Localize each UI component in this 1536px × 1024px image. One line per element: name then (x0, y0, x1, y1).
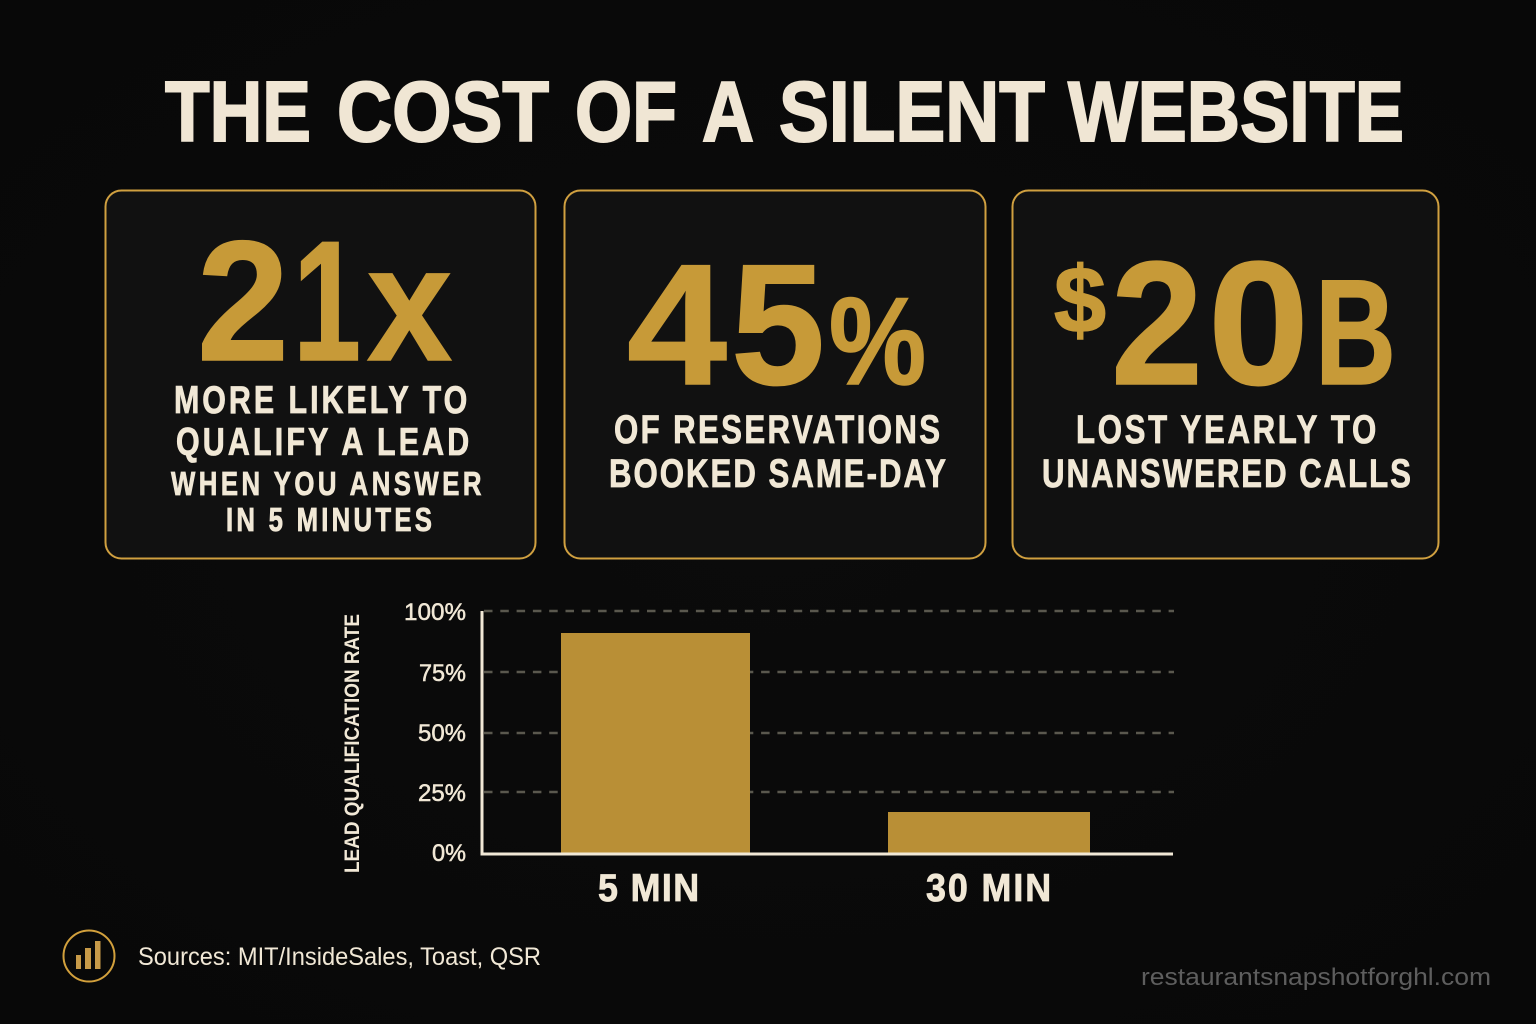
big number: 45% (627, 229, 926, 421)
y axis title: LEAD QUALIFICATION RATE (341, 614, 364, 873)
website credit: restaurantsnapshotforghl.com (1141, 964, 1491, 991)
big number: 21x: 1 (293, 206, 361, 397)
big number: 21x: 2 (197, 206, 289, 397)
description: 45%: BOOKED SAME-DAY (609, 451, 946, 496)
y axis tick labels: 50% (418, 720, 466, 747)
big number: $20B (1054, 226, 1396, 422)
description: 21x: IN 5 MINUTES (226, 502, 432, 539)
big number: 45%: % (829, 273, 926, 411)
big number: $20B: B (1315, 248, 1396, 416)
y axis tick labels: 0% (432, 840, 466, 867)
title: WEBSITE (1068, 65, 1404, 160)
title: A (702, 65, 754, 160)
sources: Sources: MIT/InsideSales, Toast, QSR (138, 943, 541, 971)
title: SILENT (779, 65, 1045, 160)
icon: bar chart in circle (64, 930, 114, 982)
description: $20B: UNANSWERED CALLS (1042, 451, 1411, 496)
big number: 21x: x (367, 212, 452, 395)
title: THE (165, 65, 311, 160)
panel: 45% stat (564, 190, 986, 558)
description: 21x (171, 378, 481, 539)
y axis tick labels: 75% (419, 660, 466, 687)
description: 21x: QUALIFY A LEAD (176, 420, 469, 464)
description: $20B: LOST YEARLY TO (1076, 407, 1376, 452)
big number: 21x (197, 206, 452, 397)
x label: 30 min: 30 MIN (926, 866, 1051, 909)
y axis tick labels: 100% (404, 599, 466, 626)
description: 45%: OF RESERVATIONS (614, 407, 940, 452)
big number: $20B: 0 (1208, 226, 1309, 422)
x label: 5 min: 5 MIN (598, 866, 699, 909)
panel: 21x stat (106, 190, 536, 558)
big number: $20B: $ (1054, 247, 1106, 352)
big number: 45%: 4 (627, 229, 727, 421)
big number: $20B: 2 (1111, 226, 1203, 422)
title: COST (337, 65, 549, 160)
panel: $20B stat (1012, 190, 1438, 558)
big number: 45%: 5 (731, 229, 825, 421)
bar: 30 min (888, 812, 1090, 853)
description: 45% (609, 407, 946, 496)
axes (482, 611, 1173, 854)
description: 21x: MORE LIKELY TO (174, 378, 467, 422)
y axis tick labels: 25% (418, 780, 466, 807)
bar: 5 min (561, 633, 750, 853)
y axis tick labels (404, 599, 466, 867)
title: OF (575, 65, 677, 160)
description: $20B (1042, 407, 1411, 496)
description: 21x: WHEN YOU ANSWER (171, 466, 481, 503)
bar chart: lead qualification rate (341, 599, 1174, 909)
title (165, 65, 1404, 160)
